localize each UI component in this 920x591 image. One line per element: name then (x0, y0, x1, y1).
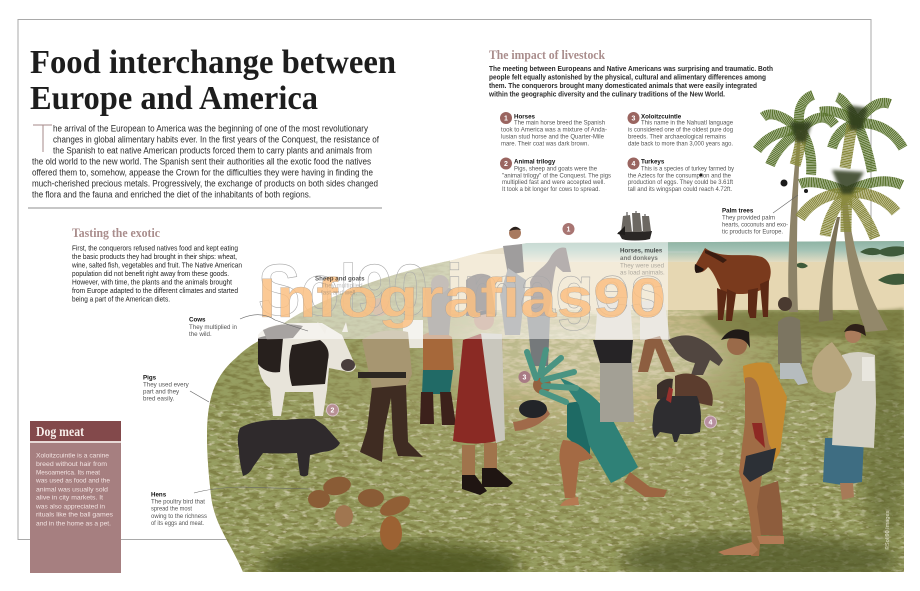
marker 1 (562, 223, 574, 235)
intro text: changes in global alimentary habits ever. In the first years of the Conquest, the resistance of (53, 134, 379, 144)
intro text (32, 124, 379, 200)
boy with orange cape (718, 329, 787, 556)
item 4: turkeys: production of eggs. They could be 3.61ft (628, 179, 733, 186)
item 3: xoloitzcuintle: 3 (632, 116, 636, 122)
trunks (788, 133, 801, 312)
item 1: horses: The main horse breed the Spanish (514, 120, 606, 126)
panel: dog meat (30, 421, 121, 573)
item 1: horses: lusian stud horse and the Quarter-Mile (501, 134, 605, 140)
panel: the impact of livestock: people felt equally astonished by the physical, cultural and alimentary differences among (489, 74, 766, 82)
title: Food interchange between (30, 44, 396, 81)
label: horses, mules and donkeys: and donkeys (620, 255, 658, 262)
intro text: the old world to the new world. The Spanish sent their authorities all the exotic food the natives (32, 156, 372, 166)
ship (617, 211, 652, 241)
item 4: turkeys: the Aztecs for the consumption and the (628, 172, 732, 180)
label: pigs: bred easily. (143, 396, 174, 402)
panel: dog meat: rituals like the ball games (36, 512, 114, 518)
background villager (778, 297, 808, 385)
item 2: animal trilogy: multiplied fast and were accepted well. (502, 179, 605, 186)
item 1: horses (500, 112, 607, 148)
panel: the impact of livestock: The meeting between Europeans and Native Americans was surprising and traumatic. Both (489, 66, 773, 73)
panel: dog meat: was also appreciated in (35, 504, 105, 510)
label: cows (189, 315, 308, 338)
panel: dog meat: breed without hair from (36, 461, 108, 468)
hens (308, 474, 413, 550)
item 3: xoloitzcuintle: This name in the Nahuatl language (641, 120, 734, 126)
person with stick and dog (638, 300, 723, 375)
item 4: turkeys: tall and its wingspan could reach 4.72ft. (628, 186, 732, 193)
man in orange tunic (420, 275, 456, 425)
label: palm trees: They provided palm (722, 214, 775, 222)
label: horses, mules and donkeys (620, 248, 698, 276)
watermark: Sol90 images (258, 251, 665, 331)
label: hens (151, 487, 310, 527)
item 4: turkeys: Turkeys (641, 158, 665, 166)
label: sheep and goats: They multiplied (321, 282, 363, 290)
marker 3 (518, 371, 530, 383)
item 3: xoloitzcuintle: date back to more than 3,000 years ago. (628, 140, 733, 148)
marker 2 (326, 404, 338, 416)
heading: tasting the exotic: Tasting the exotic (72, 225, 160, 240)
label: pigs: part and they (143, 388, 180, 396)
label: sheep and goats (315, 276, 365, 296)
Aztec figure with feathers (513, 350, 667, 506)
panel: tasting the exotic: being a part of the American diets. (72, 296, 170, 304)
ground (200, 230, 911, 590)
panel: dog meat: alive in city markets. It (36, 494, 103, 502)
item 2: animal trilogy: It took a bit longer for cows to spread. (502, 186, 600, 193)
label: sheep and goats: Sheep and goats (315, 276, 365, 282)
panel: dog meat: Mesoamerica. Its meat (36, 470, 100, 476)
intro text: much-cherished precious metals. Progressively, the exchange of products on both sides changed (32, 178, 378, 188)
label: palm trees: Palm trees (722, 208, 754, 214)
turkey (652, 374, 713, 442)
label: hens: The poultry bird that (151, 498, 205, 506)
panel: dog meat: was used as food and the (35, 478, 110, 484)
bushes (795, 246, 904, 285)
label: hens: spread the most (151, 506, 192, 512)
panel: dog meat: Dog meat (36, 425, 84, 440)
panel: dog meat: and in the home as a pet. (36, 520, 111, 528)
marker 2: 2 (331, 408, 335, 414)
item 4: turkeys: 4 (632, 161, 636, 168)
label: hens: Hens (151, 492, 167, 498)
item 1: horses: took to America was a mixture of Anda- (501, 126, 607, 134)
item 3: xoloitzcuintle: Xoloitzcuintle (641, 114, 682, 120)
item 4: turkeys (628, 158, 735, 193)
label: cows: the wild. (189, 331, 212, 338)
panel: tasting the exotic: from Europe adapted to the different climates and started (72, 288, 238, 295)
item 4: turkeys: This is a species of turkey farmed by (641, 166, 735, 172)
label: hens: of its eggs and meat. (151, 520, 204, 527)
stray specks (700, 174, 808, 193)
intro text: offered them to, somehow, appease the Crown for the difficulties they were having in finding the (32, 168, 373, 178)
white veil (245, 240, 668, 339)
panel: tasting the exotic: the basic products they had brought in their ships: wheat, (72, 254, 237, 261)
label: horses, mules and donkeys: as load animals. (620, 270, 665, 276)
panel: the impact of livestock: within the geographic diversity and the culinary traditions of the New World. (488, 92, 725, 98)
pig (238, 419, 340, 476)
item 2: animal trilogy: Animal trilogy (514, 158, 556, 166)
panel: dog meat: animal was usually sold (36, 486, 108, 494)
item 3: xoloitzcuintle: breeds. Their archaeological remains (628, 134, 726, 140)
panel: tasting the exotic: However, with time, the plants and the animals brought (72, 280, 232, 286)
label: palm trees: hearts, coconuts and exo- (722, 222, 788, 228)
label: palm trees (722, 195, 798, 236)
watermark: Infografias90 (258, 266, 666, 329)
label: horses, mules and donkeys: They were used (620, 262, 665, 270)
label: pigs: They used every (143, 382, 190, 388)
panel: tasting the exotic: population did not benefit right away from these goods. (72, 271, 229, 278)
woman with basket (812, 324, 876, 500)
marker 3: 3 (523, 374, 527, 382)
label: palm trees: tic products for Europe. (722, 228, 783, 236)
marker 4: 4 (709, 420, 713, 426)
title: Europe and America (30, 80, 318, 117)
crown palm 3 (800, 181, 902, 238)
item 2: animal trilogy: "animal trilogy" of the Conquest. The pigs (502, 172, 611, 180)
illustration: scene (200, 95, 911, 590)
item 3: xoloitzcuintle (628, 112, 734, 148)
crown palm 2 (820, 97, 903, 172)
drop cap T (33, 125, 52, 152)
palm hearts (790, 105, 868, 194)
label: sheep and goats: fast and well. (321, 290, 357, 296)
item 2: animal trilogy: 2 (504, 161, 508, 168)
label: hens: owing to the richness (151, 513, 207, 520)
panel: tasting the exotic (71, 225, 242, 304)
brown horse (695, 248, 771, 321)
label: cows: They multiplied in (189, 324, 238, 331)
item 1: horses: 1 (504, 116, 508, 122)
label: pigs: Pigs (143, 374, 157, 382)
panel: the impact of livestock (488, 47, 773, 193)
panel: tasting the exotic: First, the conquerors refused natives food and kept eating (72, 246, 238, 252)
label: cows: Cows (189, 316, 206, 324)
cow (258, 322, 356, 416)
palm trees (757, 95, 903, 332)
label: pigs (143, 374, 209, 402)
crown palm 1 (757, 95, 835, 175)
panel: dog meat: Xoloitzcuintle is a canine (36, 452, 109, 460)
item 2: animal trilogy (500, 158, 611, 193)
woman in red (453, 310, 513, 495)
dog meat header (30, 421, 121, 441)
heading: impact of livestock: The impact of livestock (489, 47, 606, 62)
item 1: horses: mare. Their coat was dark brown. (501, 140, 589, 148)
item 2: animal trilogy: Pigs, sheep and goats were the (514, 166, 598, 172)
woman in grey dress (593, 296, 634, 422)
item 3: xoloitzcuintle: is considered one of the oldest pure dog (628, 126, 734, 134)
intro text: the Spanish to eat native American products forced them to carry plants and animals from (53, 146, 372, 156)
panel: the impact of livestock: them. The conquerors brought many domesticated animals that were easily integrated (489, 83, 757, 90)
title (30, 44, 396, 117)
marker 1: 1 (567, 226, 571, 234)
credit: ©Sol 90 Images (884, 511, 891, 550)
panel: tasting the exotic: wine, salted fish, vegetables and fruit. The Native American (71, 262, 242, 270)
rider and horse (403, 227, 571, 366)
label: horses, mules and donkeys: Horses, mules (620, 248, 663, 254)
item 1: horses: Horses (514, 114, 536, 120)
man in tan tunic (358, 298, 423, 462)
marker 4 (704, 416, 716, 428)
dog meat body (30, 443, 121, 573)
intro text: the flora and the fauna and enriched the diet of the inhabitants of both regions. (32, 190, 311, 200)
intro text: he arrival of the European to America was the beginning of one of the most revolutionary (53, 124, 368, 134)
